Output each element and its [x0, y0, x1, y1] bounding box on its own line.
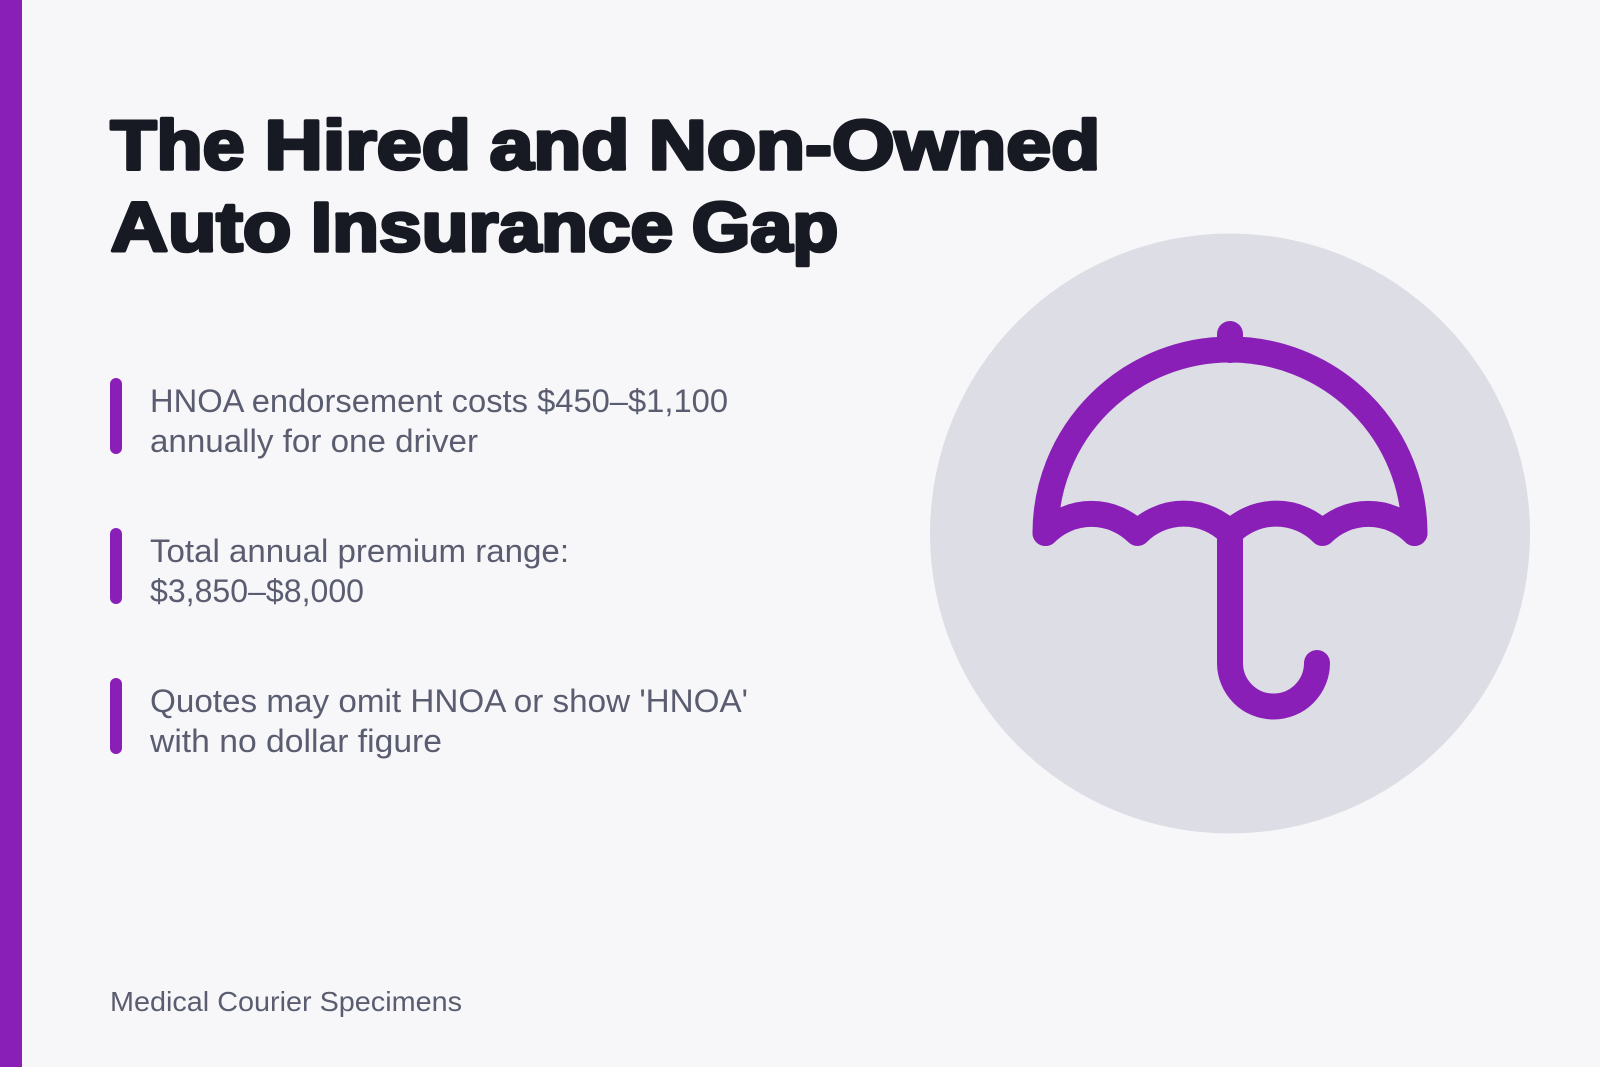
- bullet: HNOA endorsement cost: annually for one driver: [150, 423, 478, 459]
- bullet: total annual premium range: [110, 528, 569, 609]
- left accent bar: [0, 0, 22, 1067]
- title: Auto: [111, 188, 291, 266]
- icon: umbrella: [1046, 334, 1414, 706]
- bullet: quotes may omit HNOA: with no dollar figure: [149, 723, 442, 759]
- footer source: Medical Courier Specimens: [110, 986, 462, 1017]
- bullet: HNOA endorsement cost: [110, 378, 728, 459]
- icon circle background: [930, 234, 1530, 834]
- title: [110, 106, 1100, 266]
- title: Hired: [264, 106, 471, 184]
- bullet: total annual premium range: $3,850–$8,000: [150, 573, 364, 609]
- bullet: quotes may omit HNOA: [110, 678, 748, 759]
- title: Gap: [692, 188, 838, 266]
- title: Insurance: [311, 188, 673, 266]
- bullet: total annual premium range: Total annual premium range:: [150, 533, 569, 569]
- title: and: [490, 106, 629, 184]
- bullet: HNOA endorsement cost: HNOA endorsement costs $450–$1,100: [150, 383, 728, 419]
- title: The: [110, 106, 244, 184]
- title: Non-Owned: [649, 106, 1100, 184]
- bullet: quotes may omit HNOA: Quotes may omit HNOA or show 'HNOA': [150, 683, 748, 719]
